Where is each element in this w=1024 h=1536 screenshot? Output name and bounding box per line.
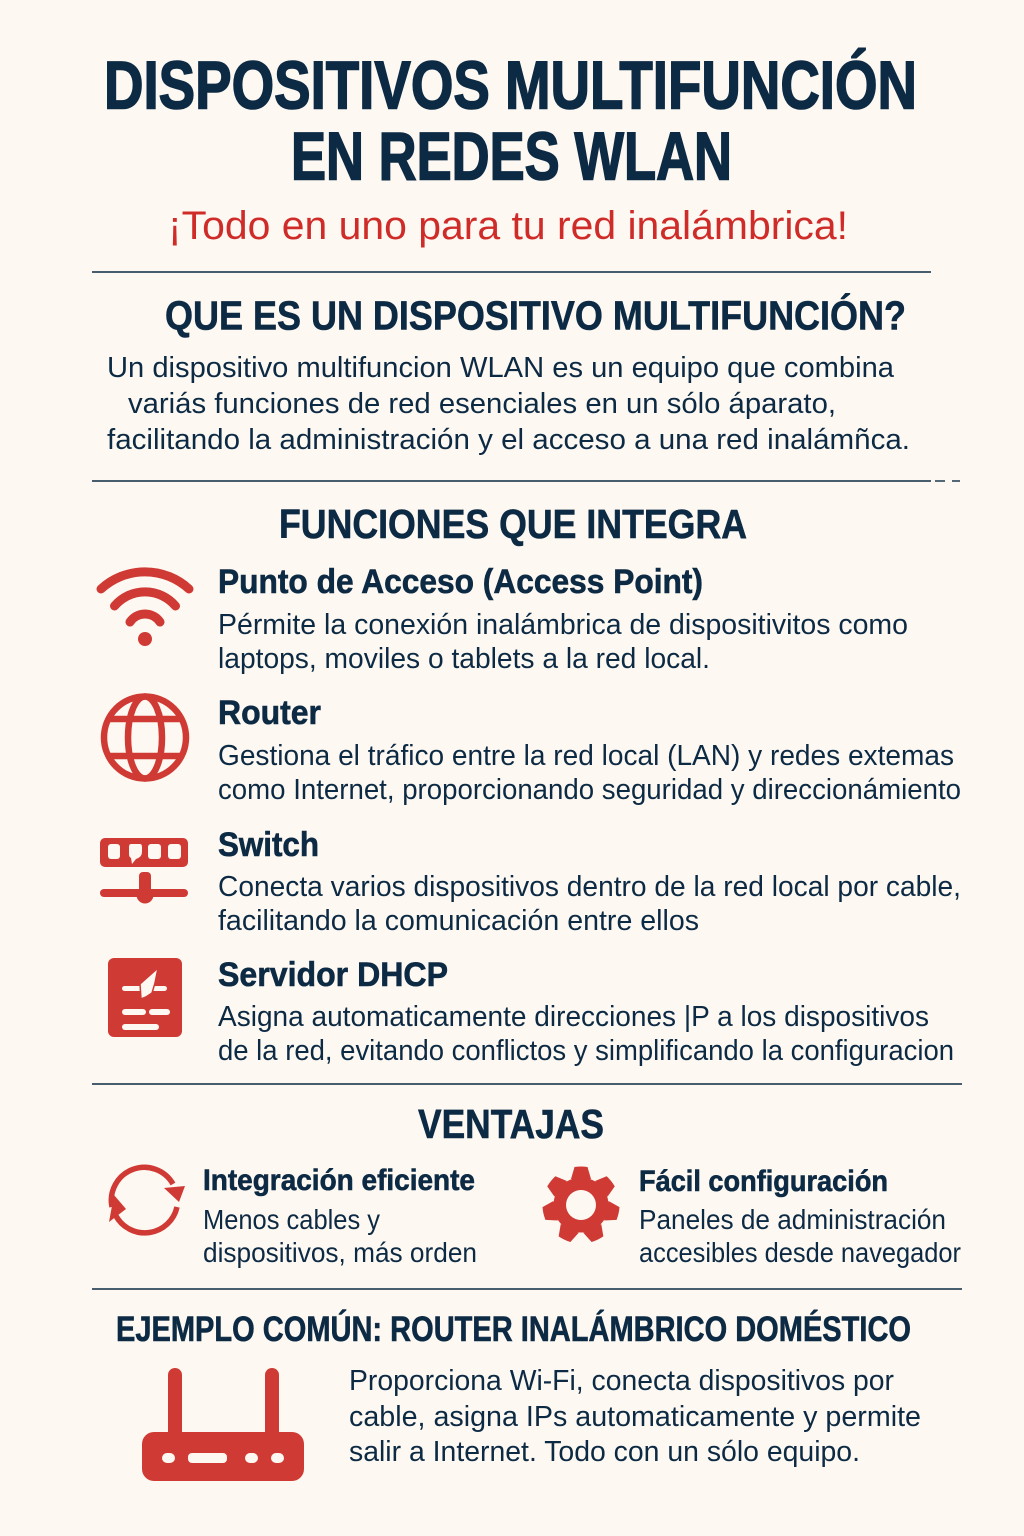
title (104, 48, 917, 194)
function: dhcp server: Asigna automaticamente direcciones |P a los dispositivos (218, 1001, 929, 1033)
icon: gear (541, 1166, 621, 1244)
icon: globe (104, 696, 186, 778)
panel: example (116, 1309, 921, 1481)
function: dhcp server (218, 956, 954, 1067)
definition text: facilitando la administración y el acceso a una red inalámñca. (107, 424, 910, 456)
function: switch: facilitando la comunicación entre ellos (218, 905, 699, 937)
icon: refresh arrows (109, 1167, 185, 1233)
definition text: variás funciones de red esenciales en un sólo áparato, (128, 388, 836, 420)
example text (349, 1365, 921, 1468)
heading: functions: FUNCIONES QUE INTEGRA (279, 501, 747, 547)
advantage: integration: dispositivos, más orden (203, 1237, 477, 1268)
function: access point (218, 563, 908, 675)
example text: Proporciona Wi-Fi, conecta dispositivos por (349, 1365, 894, 1397)
function: access point: Punto de Acceso (Access Point) (218, 563, 703, 601)
icon: wireless router (142, 1368, 304, 1481)
icon: dhcp server (108, 958, 182, 1037)
definition text: Un dispositivo multifuncion WLAN es un equipo que combina (107, 352, 895, 384)
function: router: Gestiona el tráfico entre la red local (LAN) y redes extemas (218, 740, 954, 772)
function: dhcp server: de la red, evitando conflictos y simplificando la configuracion (218, 1035, 954, 1067)
advantage: easy setup: accesibles desde navegador (639, 1237, 961, 1268)
icon: wifi (101, 572, 189, 646)
function: router: Router (218, 694, 321, 732)
title: EN REDES WLAN (291, 118, 732, 194)
function: dhcp server: Servidor DHCP (218, 956, 448, 994)
subtitle: ¡Todo en uno para tu red inalámbrica! (168, 204, 848, 248)
advantage: easy setup: Paneles de administración (639, 1204, 946, 1235)
definition text (107, 352, 910, 456)
function: switch: Switch (218, 826, 319, 864)
icon: switch (100, 838, 188, 904)
example text: cable, asigna IPs automaticamente y permite (349, 1401, 921, 1433)
panel: functions (100, 501, 961, 1067)
heading: advantages: VENTAJAS (418, 1101, 604, 1147)
advantage: integration (203, 1164, 477, 1268)
function: switch (218, 826, 961, 937)
header (104, 48, 917, 248)
function: router (218, 694, 961, 806)
panel: definition (107, 292, 910, 456)
function: router: como Internet, proporcionando seguridad y direccionámiento (218, 774, 961, 806)
panel: advantages (109, 1101, 961, 1268)
heading: definition: QUE ES UN DISPOSITIVO MULTIFUNCIÓN? (165, 292, 906, 338)
example text: salir a Internet. Todo con un sólo equipo. (349, 1436, 860, 1468)
advantage: easy setup (639, 1165, 961, 1268)
function: access point: laptops, moviles o tablets a la red local. (218, 643, 710, 675)
function: access point: Pérmite la conexión inalámbrica de dispositivitos como (218, 609, 908, 641)
advantage: integration: Menos cables y (203, 1204, 380, 1235)
advantage: integration: Integración eficiente (203, 1164, 475, 1197)
function: switch: Conecta varios dispositivos dentro de la red local por cable, (218, 871, 961, 903)
advantage: easy setup: Fácil configuración (639, 1165, 888, 1198)
